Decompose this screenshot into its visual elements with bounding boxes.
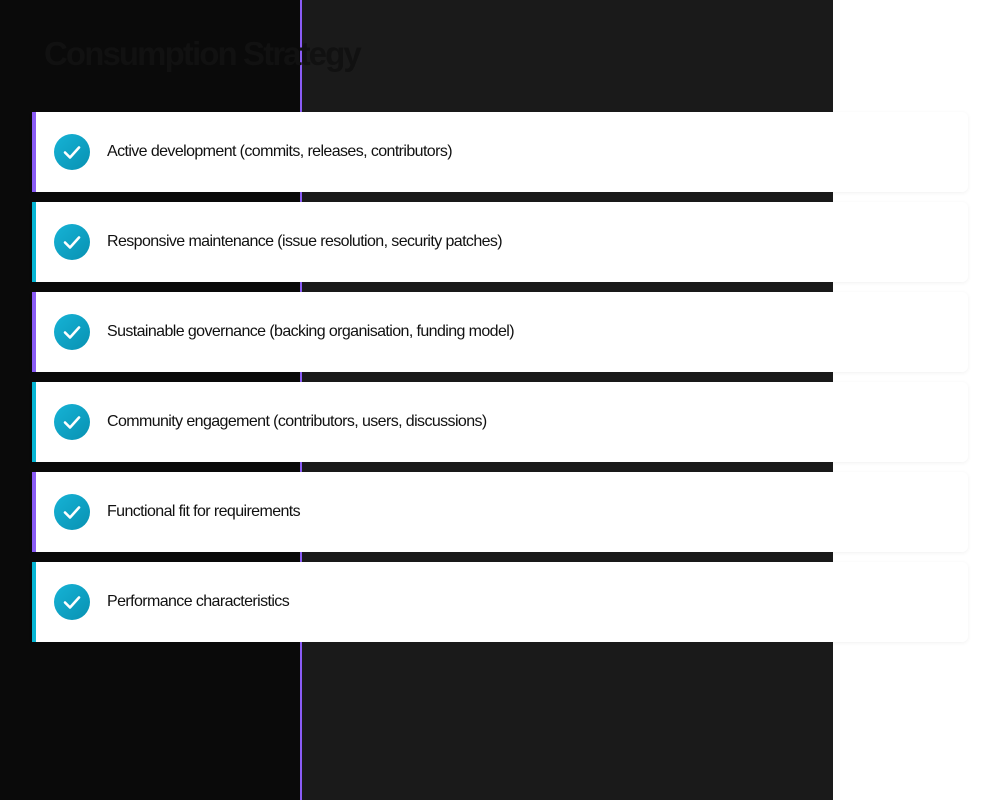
title: Consumption Strategy: [44, 35, 360, 72]
text: Active development (commits, releases, contributors): [107, 143, 452, 160]
icon: check: [54, 224, 90, 260]
icon: check: [54, 584, 90, 620]
text: Functional fit for requirements: [107, 503, 300, 520]
card 6: [32, 562, 968, 642]
icon: check: [54, 494, 90, 530]
icon: check: [54, 314, 90, 350]
card 5: [32, 472, 968, 552]
card 2: [32, 202, 968, 282]
card 4: [32, 382, 968, 462]
icon: check: [54, 404, 90, 440]
text: Sustainable governance (backing organisation, funding model): [107, 323, 514, 340]
text: Community engagement (contributors, users, discussions): [107, 413, 487, 430]
card 1: [32, 112, 968, 192]
text: Performance characteristics: [107, 593, 289, 610]
icon: check: [54, 134, 90, 170]
card 3: [32, 292, 968, 372]
text: Responsive maintenance (issue resolution, security patches): [107, 233, 502, 250]
